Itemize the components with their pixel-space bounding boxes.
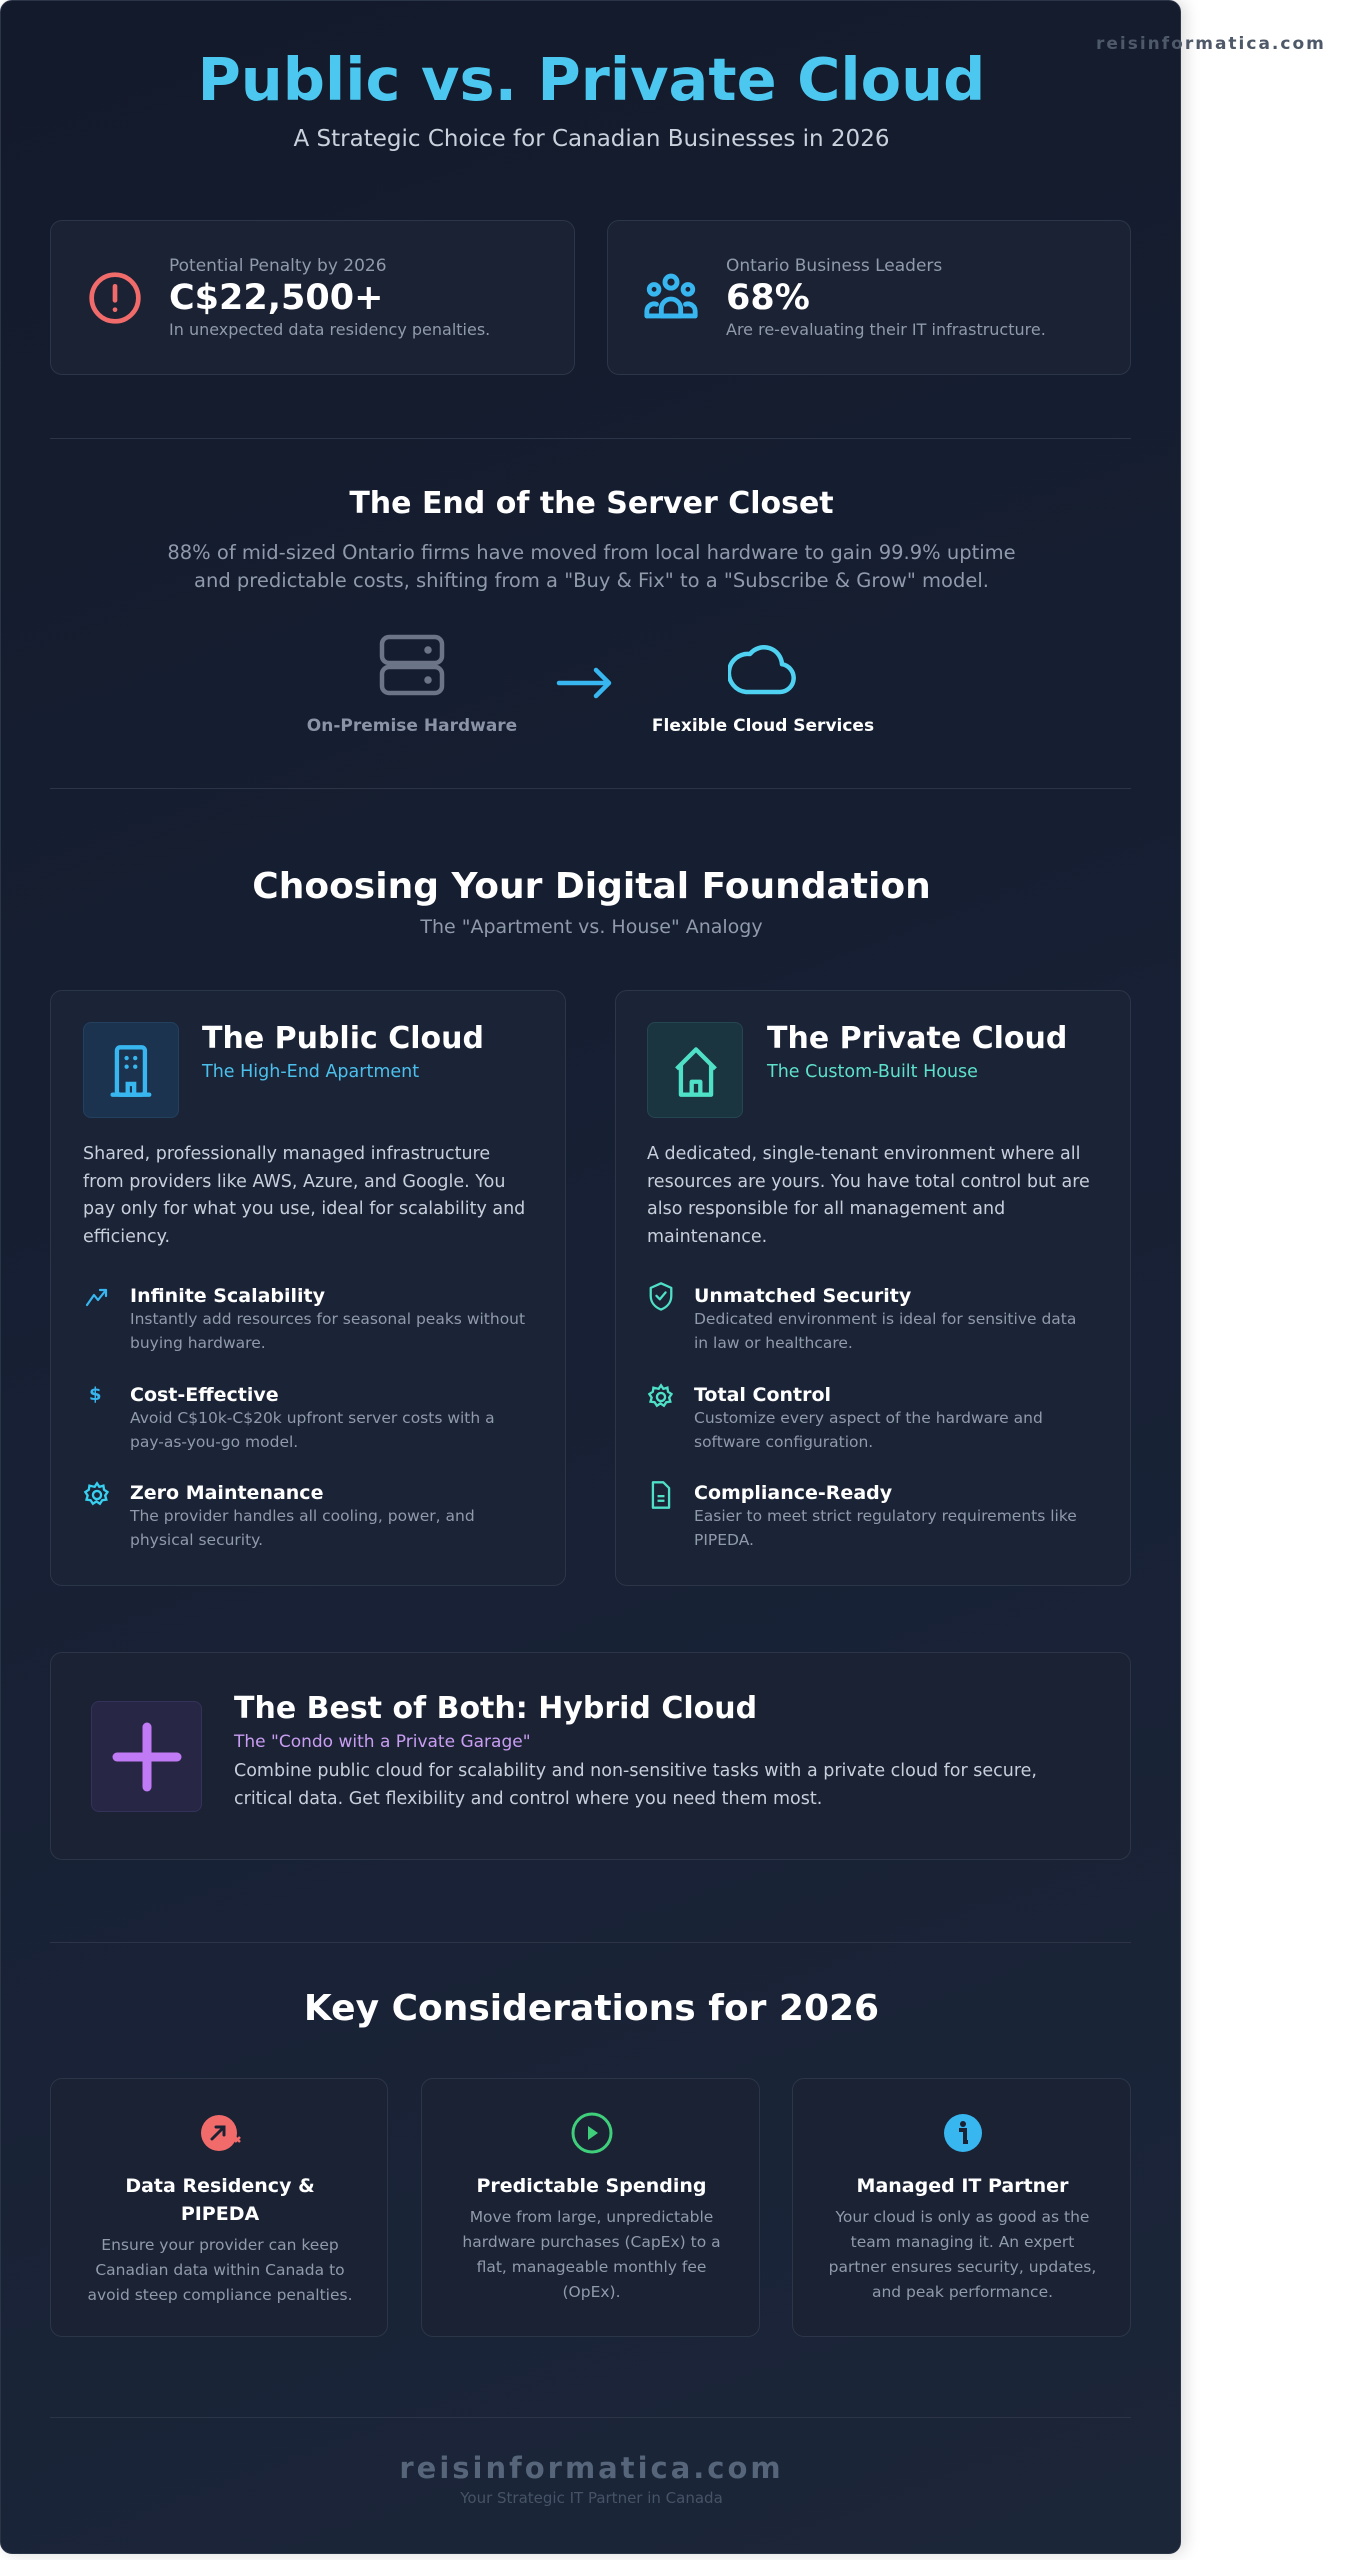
card: managed IT partner	[792, 2078, 1131, 2337]
panel: private cloud	[615, 990, 1131, 1586]
feature: security: Dedicated environment is ideal for sensitive data in law or healthcare.	[694, 1310, 1076, 1352]
hybrid text	[234, 1691, 1037, 1809]
icon: play	[572, 2112, 612, 2154]
panel title: The Private Cloud	[767, 1021, 1067, 1056]
hybrid text: The "Condo with a Private Garage"	[234, 1732, 531, 1752]
card text	[829, 2175, 1096, 2301]
icon: building	[83, 1022, 179, 1118]
icon: info	[944, 2114, 982, 2152]
stat text: Are re-evaluating their IT infrastructure.	[726, 320, 1046, 339]
panel description: A dedicated, single-tenant environment where all resources are yours. You have total control but are also responsible for all management and maintenance.	[647, 1144, 1090, 1247]
hybrid text: The Best of Both: Hybrid Cloud	[234, 1691, 757, 1726]
stat: leaders	[607, 220, 1131, 375]
title: Public vs. Private Cloud	[198, 45, 985, 114]
icon: users	[644, 274, 698, 318]
heading: key considerations: Key Considerations for 2026	[304, 1988, 879, 2029]
card text	[87, 2175, 352, 2304]
paragraph: server closet: 88% of mid-sized Ontario firms have moved from local hardware to gain 99.9% uptime	[167, 541, 1016, 564]
feature: cost: pay-as-you-go model.	[130, 1433, 298, 1451]
card text: Your cloud is only as good as the	[836, 2208, 1089, 2226]
icon: alert	[89, 272, 141, 324]
feature: scalability: buying hardware.	[130, 1334, 266, 1352]
panel description: Shared, professionally managed infrastructure from providers like AWS, Azure, and Google. You pay only for what you use, ideal for scalability and efficiency.	[83, 1144, 525, 1247]
feature: cost	[89, 1384, 495, 1451]
stat text: In unexpected data residency penalties.	[169, 320, 490, 339]
hybrid text: Combine public cloud for scalability and non-sensitive tasks with a private cloud for secure, critical data. Get flexibility and control where you need them most.	[234, 1761, 1037, 1809]
feature: security: Unmatched Security	[694, 1285, 911, 1307]
feature: maintenance: The provider handles all cooling, power, and physical security.	[130, 1507, 475, 1549]
heading: digital foundation: Choosing Your Digital Foundation	[252, 866, 931, 907]
label: cloud services: Flexible Cloud Services	[652, 716, 874, 736]
feature: scalability	[86, 1285, 525, 1352]
feature: control	[648, 1383, 1043, 1451]
panel: hybrid cloud	[50, 1652, 1131, 1860]
stat: penalty	[50, 220, 575, 375]
stat text	[726, 256, 1046, 339]
card text: Ensure your provider can keep Canadian data within Canada to avoid steep compliance penalties.	[87, 2236, 352, 2304]
panel title: The High-End Apartment	[202, 1062, 419, 1082]
label: on-premise: On-Premise Hardware	[307, 716, 517, 736]
card text: Predictable Spending	[476, 2175, 706, 2197]
icon: cloud	[728, 645, 796, 694]
feature: cost: Avoid C$10k-C$20k upfront server costs with a	[130, 1409, 495, 1427]
feature: cost: $	[89, 1384, 102, 1405]
card text: PIPEDA	[181, 2203, 259, 2225]
card: predictable spending	[421, 2078, 760, 2337]
feature: compliance: Compliance-Ready	[694, 1482, 892, 1504]
paragraph: server closet	[167, 541, 1016, 592]
feature: scalability: Infinite Scalability	[130, 1285, 325, 1307]
feature: scalability: Instantly add resources for seasonal peaks without	[130, 1310, 525, 1328]
icon: house	[647, 1022, 743, 1118]
icon: plus	[91, 1701, 202, 1812]
heading: server closet: The End of the Server Closet	[349, 486, 834, 521]
stat text: 68%	[726, 278, 810, 318]
feature: maintenance	[84, 1481, 475, 1549]
card text: team managing it. An expert	[851, 2233, 1074, 2251]
feature: compliance	[652, 1481, 1077, 1549]
paragraph: server closet: and predictable costs, shifting from a "Buy & Fix" to a "Subscribe & Grow" model.	[194, 569, 989, 592]
feature: cost: Cost-Effective	[130, 1384, 279, 1406]
card: data residency	[50, 2078, 388, 2337]
stat text: Potential Penalty by 2026	[169, 256, 387, 276]
card text: partner ensures security, updates,	[829, 2258, 1096, 2276]
panel title	[202, 1021, 484, 1082]
stat text: C$22,500+	[169, 278, 383, 318]
icon: data residency	[201, 2115, 241, 2151]
panel title: The Public Cloud	[202, 1021, 484, 1056]
footer brand: reisinformatica.com	[399, 2451, 784, 2485]
card text: Managed IT Partner	[857, 2175, 1068, 2197]
panel: public cloud	[50, 990, 566, 1586]
feature: maintenance: Zero Maintenance	[130, 1482, 323, 1504]
panel title: The Custom-Built House	[767, 1062, 978, 1082]
footer tagline: Your Strategic IT Partner in Canada	[460, 2489, 723, 2507]
stat text	[169, 256, 490, 339]
panel title	[766, 1021, 1067, 1082]
feature: compliance: Easier to meet strict regulatory requirements like PIPEDA.	[694, 1507, 1077, 1549]
subtitle: A Strategic Choice for Canadian Businesses in 2026	[294, 126, 889, 152]
icon: server	[380, 634, 444, 696]
watermark: reisinformatica.com	[1096, 34, 1326, 54]
card text: and peak performance.	[872, 2283, 1053, 2301]
feature: control: Customize every aspect of the hardware and software configuration.	[694, 1409, 1043, 1451]
feature: security	[650, 1282, 1076, 1352]
card text: Data Residency &	[125, 2175, 315, 2197]
stat text: Ontario Business Leaders	[726, 256, 942, 276]
card text: Move from large, unpredictable hardware purchases (CapEx) to a flat, manageable monthly fee (OpEx).	[462, 2208, 721, 2301]
arrow	[556, 668, 612, 698]
subheading: analogy: The "Apartment vs. House" Analogy	[420, 916, 763, 938]
feature: control: Total Control	[694, 1384, 831, 1406]
